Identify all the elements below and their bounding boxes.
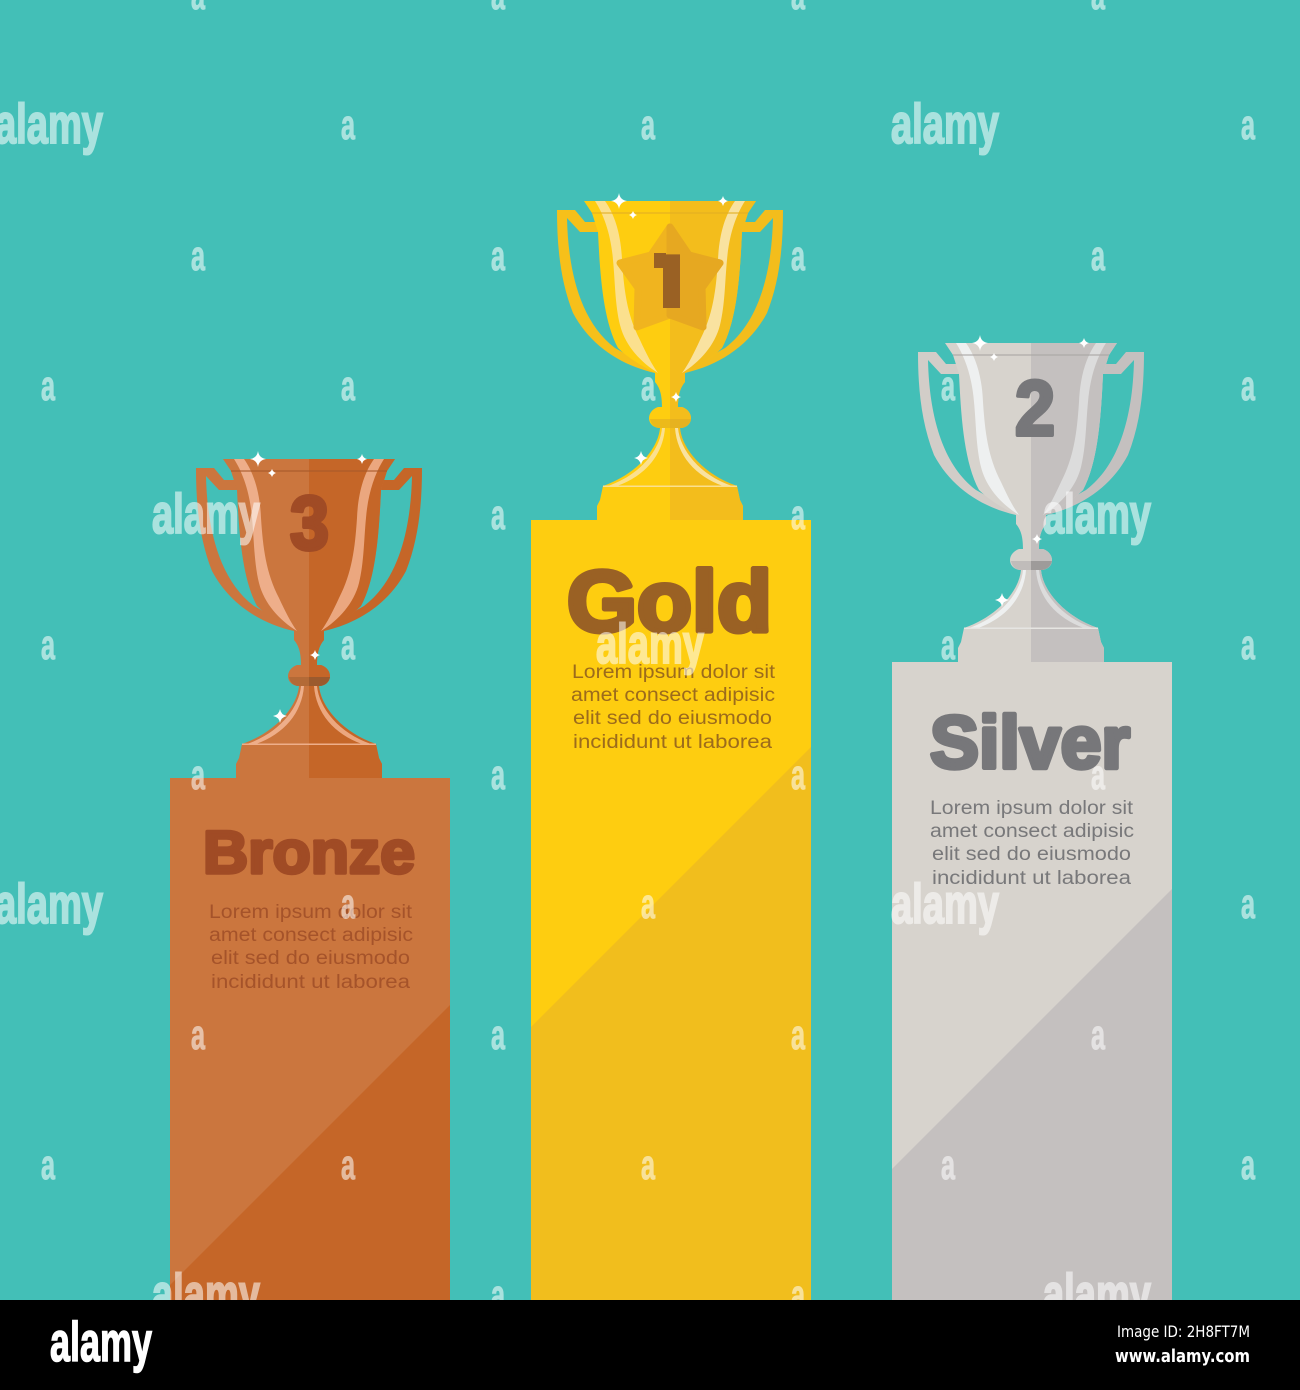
text block: silver description: incididunt ut laborea [932,868,1131,889]
text block: silver description: Lorem ipsum dolor sit [930,798,1134,819]
watermark: repeated alamy marks: alamy [152,482,260,545]
watermark: repeated alamy marks: alamy [596,612,704,675]
number 1 [654,253,680,308]
watermark: repeated alamy marks: a [341,362,355,409]
watermark: repeated alamy marks: a [191,1011,205,1058]
watermark: repeated alamy marks: a [1241,101,1255,148]
watermark: repeated alamy marks: a [1091,1011,1105,1058]
text block: silver description [930,798,1134,889]
icon: silver trophy [918,335,1144,662]
watermark: repeated alamy marks: a [791,751,805,798]
text block: gold description: Lorem ipsum dolor sit [572,662,776,683]
panel: gold pillar [531,520,811,1300]
watermark: repeated alamy marks: a [341,101,355,148]
watermark: repeated alamy marks: a [791,1011,805,1058]
footer bar [0,1300,1300,1390]
icon: bronze trophy [196,451,422,778]
watermark: repeated alamy marks: a [491,232,505,279]
panel: silver pillar [892,662,1172,1300]
panel: bronze pillar [170,778,450,1300]
watermark: repeated alamy marks: a [341,1141,355,1188]
watermark: repeated alamy marks: a [791,1271,805,1318]
watermark: repeated alamy marks: a [641,1141,655,1188]
watermark: repeated alamy marks: a [641,362,655,409]
watermark: repeated alamy marks: a [1241,1141,1255,1188]
watermark: repeated alamy marks: a [491,1271,505,1318]
text block: gold description: elit sed do eiusmodo [573,708,772,729]
number 1: 1 [632,237,706,325]
text block: bronze description: Lorem ipsum dolor sit [209,902,413,923]
icon: gold star [620,227,720,327]
watermark: repeated alamy marks: a [791,232,805,279]
text block: bronze description: amet consect adipisic [209,925,413,946]
icon: gold sparkles [611,193,728,465]
watermark: repeated alamy marks: a [41,1141,55,1188]
watermark: repeated alamy marks: alamy [1043,482,1151,545]
text block: bronze description: elit sed do eiusmodo [211,948,410,969]
watermark: repeated alamy marks: a [341,880,355,927]
watermark: repeated alamy marks: a [1091,232,1105,279]
watermark: repeated alamy marks: a [641,880,655,927]
watermark: repeated alamy marks: alamy [891,872,999,935]
icon: silver sparkles [972,335,1089,607]
watermark: repeated alamy marks: a [791,491,805,538]
watermark: repeated alamy marks: a [1241,880,1255,927]
text block: silver description: elit sed do eiusmodo [932,844,1131,865]
number 2: 2 [1015,364,1055,452]
footer image id: Image ID: 2H8FT7M [1117,1322,1250,1341]
watermark: repeated alamy marks: a [1241,362,1255,409]
watermark: repeated alamy marks: a [641,101,655,148]
text block: gold description: incididunt ut laborea [573,732,772,753]
watermark: repeated alamy marks: a [341,621,355,668]
text block: gold description: amet consect adipisic [571,685,775,706]
watermark: repeated alamy marks: a [1241,621,1255,668]
watermark: repeated alamy marks: alamy [891,92,999,155]
watermark: repeated alamy marks: alamy [152,1262,260,1325]
text block: gold description [571,662,776,753]
watermark: repeated alamy marks: a [491,751,505,798]
watermark: repeated alamy marks: alamy [1043,1262,1151,1325]
watermark: repeated alamy marks: a [1091,751,1105,798]
icon: gold trophy [557,193,783,520]
watermark: repeated alamy marks: a [491,1011,505,1058]
watermark: repeated alamy marks: a [191,232,205,279]
icon: bronze sparkles [250,451,367,723]
footer logo: alamy [50,1310,152,1373]
text block: bronze description [209,902,413,993]
number 3: 3 [290,481,329,566]
watermark: repeated alamy marks: a [41,362,55,409]
watermark: repeated alamy marks: a [491,491,505,538]
watermark: repeated alamy marks: a [41,621,55,668]
heading: Bronze: Bronze [203,819,415,886]
watermark: repeated alamy marks: a [941,621,955,668]
text block: silver description: amet consect adipisic [930,821,1134,842]
watermark: repeated alamy marks: a [191,751,205,798]
watermark: repeated alamy marks: a [941,362,955,409]
heading: Silver: Silver [930,701,1130,784]
text block: bronze description: incididunt ut laborea [211,972,410,993]
heading: Gold: Gold [567,554,772,650]
watermark: repeated alamy marks: a [941,1141,955,1188]
footer url: www.alamy.com [1115,1346,1250,1367]
